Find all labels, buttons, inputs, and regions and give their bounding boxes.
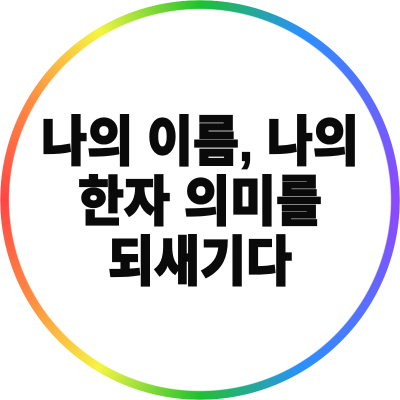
title: 한자 의미를 bbox=[78, 172, 322, 232]
title: 되새기다 bbox=[108, 232, 292, 292]
title: 나의 이름, 나의 bbox=[41, 112, 359, 172]
